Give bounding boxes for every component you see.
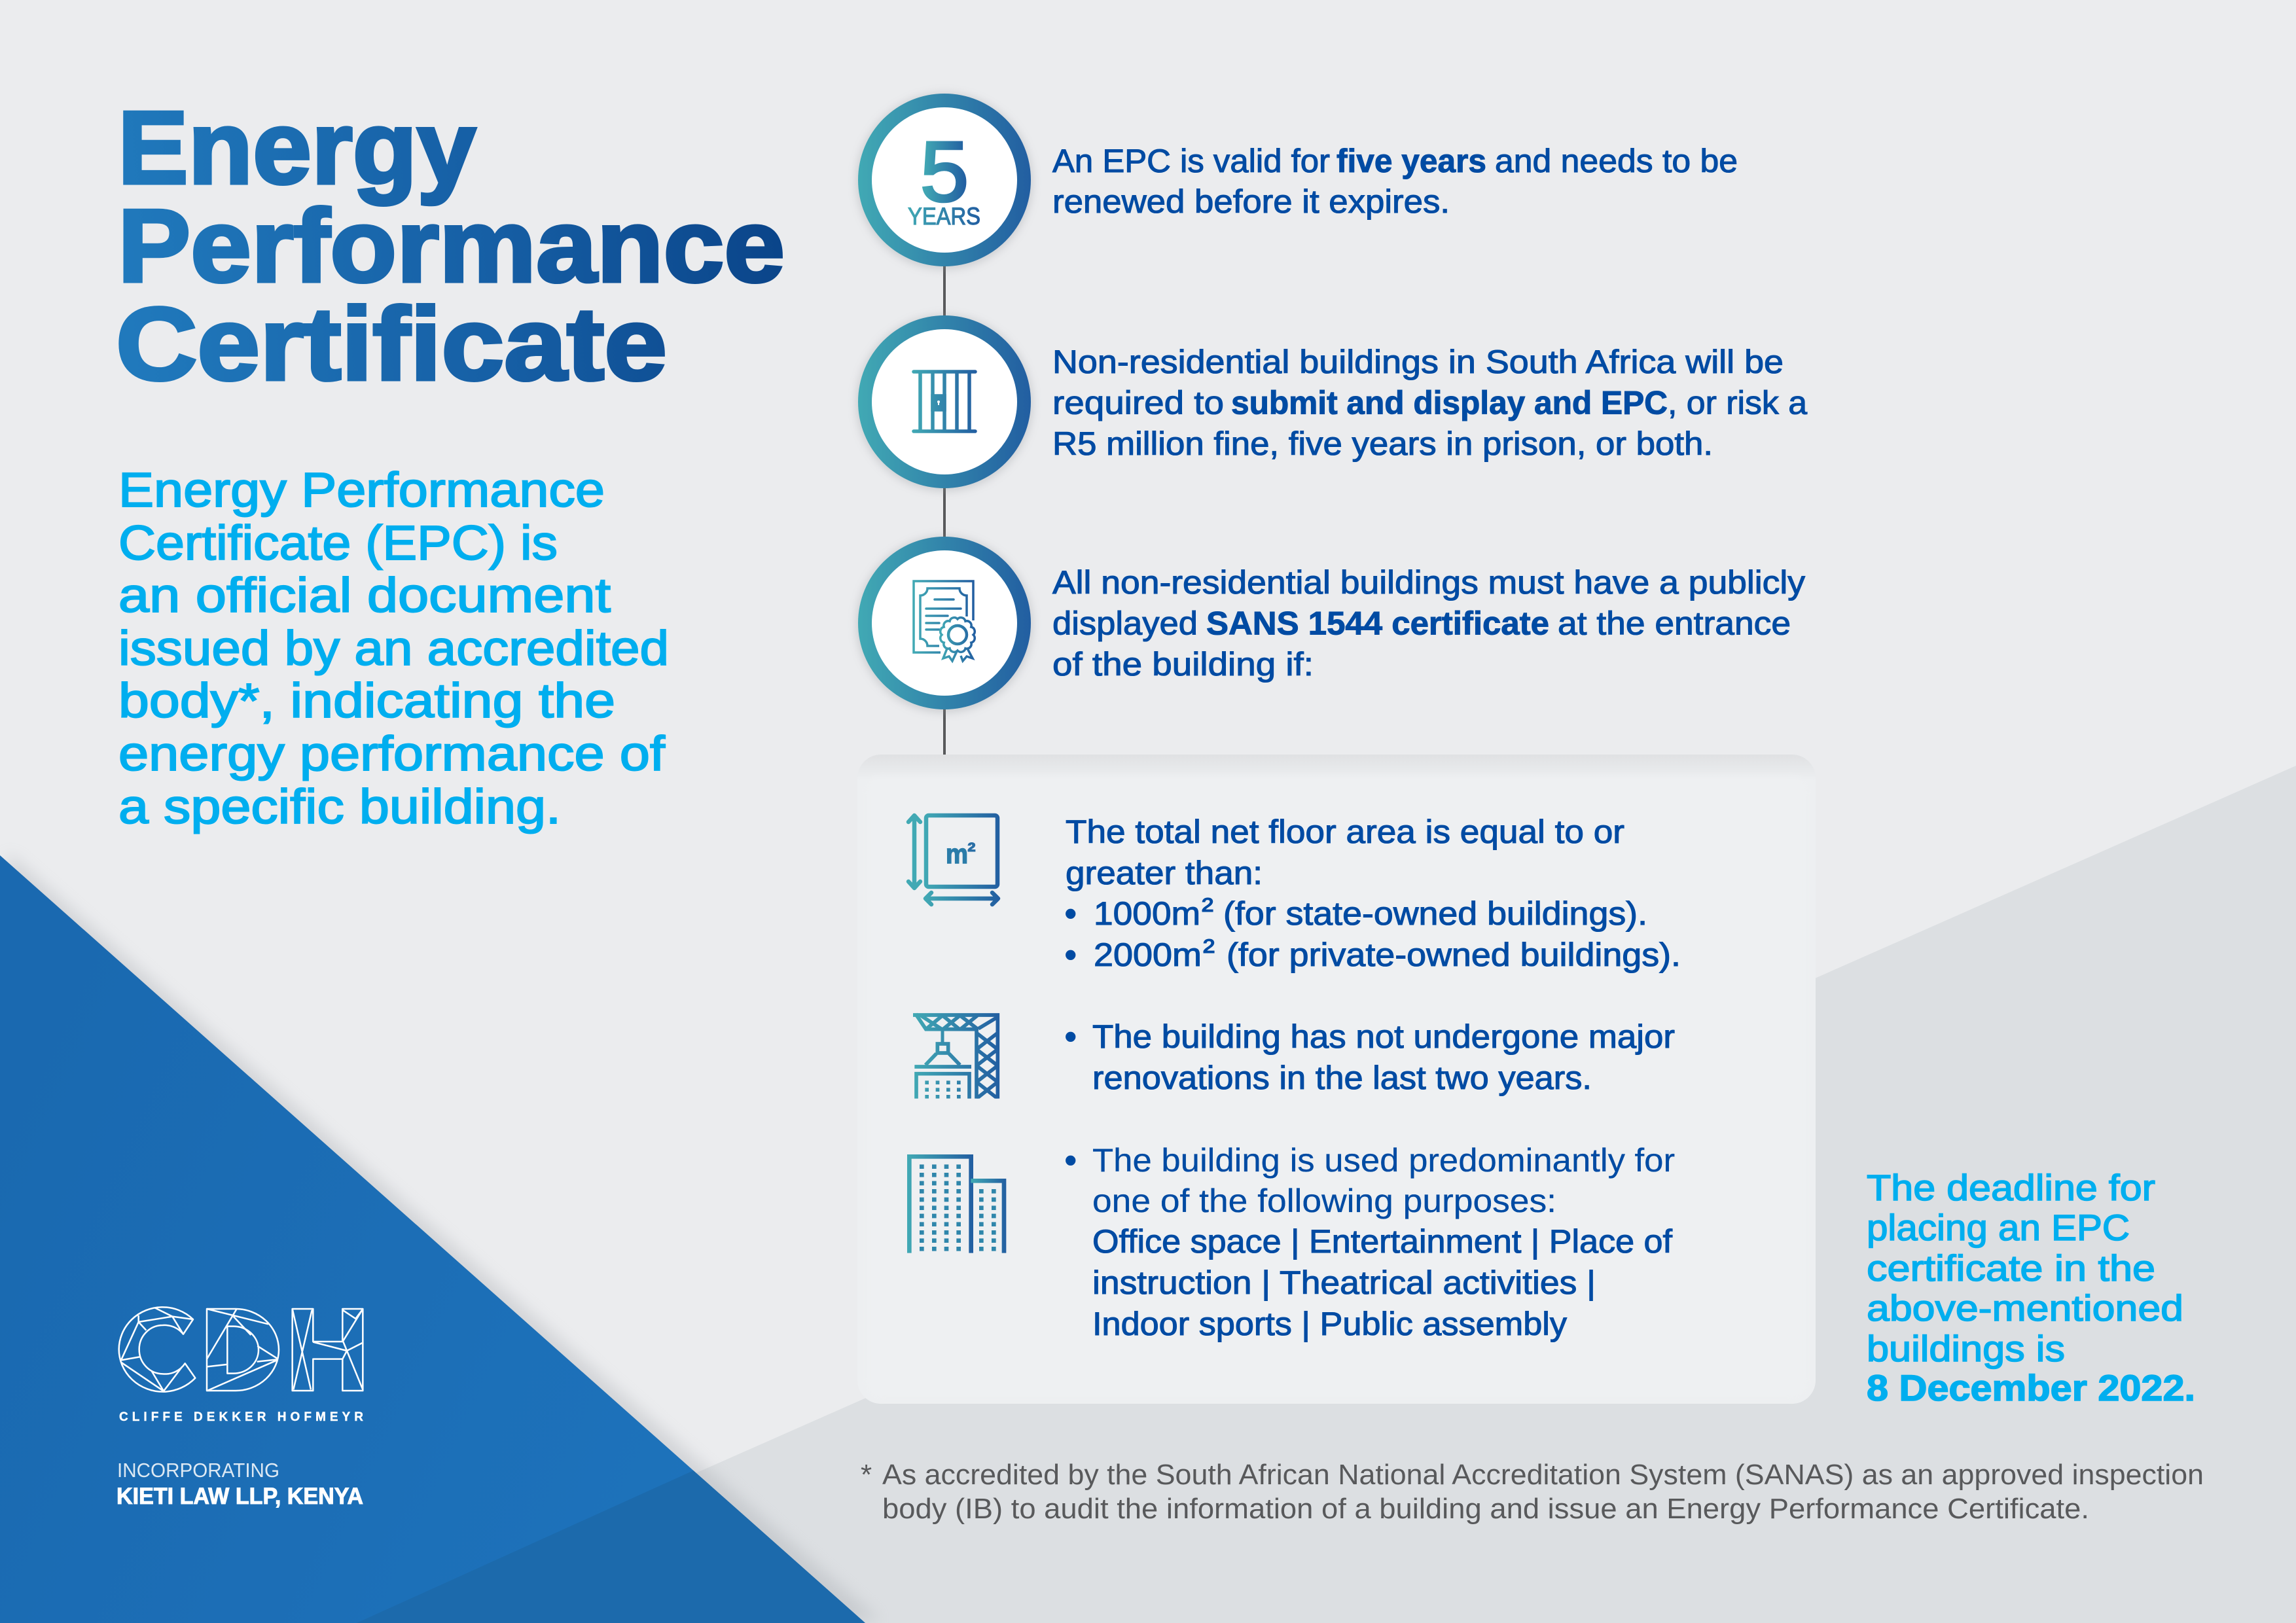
step 1 text: and needs to be: [1495, 143, 1738, 179]
intro text block: issued by an accredited: [118, 621, 669, 675]
floor area text: ²: [1203, 933, 1215, 969]
step 3 text: SANS 1544 certificate: [1206, 605, 1549, 641]
intro text block: an official document: [118, 568, 611, 622]
step 2 text: R5 million fine, five years in prison, or both.: [1052, 425, 1713, 462]
floor area text: The total net floor area is equal to or: [1066, 813, 1624, 850]
renovations text: renovations in the last two years.: [1092, 1060, 1592, 1096]
deadline callout: certificate in the: [1867, 1247, 2155, 1289]
icon: office buildings: [909, 1156, 1004, 1253]
icon: floor area m2: ²: [967, 838, 976, 866]
icon: floor area m2: m: [946, 838, 968, 869]
step 3 text: displayed: [1052, 605, 1198, 641]
step 1 text: renewed before it expires.: [1052, 183, 1450, 220]
step 3 text: [1052, 564, 1805, 683]
renovations text: [1065, 1018, 1675, 1096]
intro text block: [118, 463, 669, 834]
building use text: Office space | Entertainment | Place of: [1092, 1223, 1672, 1260]
step 3 text: of the building if:: [1052, 646, 1314, 683]
footnote: [861, 1459, 2204, 1525]
floor area text: (for private-owned buildings).: [1227, 936, 1681, 973]
step 2 text: submit and display and EPC: [1231, 385, 1668, 421]
step 3 circle: certificate icon: [857, 537, 1032, 712]
step 2 circle: jail bars icon: [857, 315, 1032, 491]
step 2 text: [1052, 344, 1807, 462]
timeline connector line: [943, 262, 946, 756]
blue corner triangle: [0, 853, 880, 1623]
renovations text: •: [1065, 1018, 1077, 1055]
step 2 text: , or risk a: [1668, 385, 1807, 421]
incorporating text: KIETI LAW LLP, KENYA: [117, 1484, 363, 1509]
renovations text: The building has not undergone major: [1092, 1018, 1675, 1055]
deadline callout: The deadline for: [1867, 1167, 2155, 1208]
title: [116, 90, 785, 402]
step 1 circle: 5 years: YEARS: [908, 203, 980, 230]
title: Energy: [118, 90, 476, 205]
footnote: As accredited by the South African National Accreditation System (SANAS) as an approved inspection: [882, 1459, 2204, 1491]
step 2 text: Non-residential buildings in South Africa will be: [1052, 344, 1784, 380]
floor area text: 1000m: [1094, 895, 1200, 932]
incorporating text: INCORPORATING: [117, 1459, 279, 1482]
floor area text: 2000m: [1094, 936, 1202, 973]
intro text block: a specific building.: [118, 779, 561, 834]
floor area text: ²: [1202, 891, 1213, 928]
building use text: Indoor sports | Public assembly: [1092, 1306, 1567, 1342]
building use text: instruction | Theatrical activities |: [1092, 1264, 1596, 1301]
intro text block: energy performance of: [118, 726, 665, 781]
step 1 circle: 5 years: [857, 94, 1032, 269]
icon: floor area m2: [908, 815, 998, 904]
step 1 circle: 5 years: 5: [920, 124, 969, 219]
deadline callout: above-mentioned: [1867, 1287, 2183, 1329]
building use text: The building is used predominantly for: [1092, 1142, 1675, 1179]
intro text block: Certificate (EPC) is: [118, 516, 558, 570]
building use text: one of the following purposes:: [1092, 1183, 1556, 1219]
building use text: •: [1065, 1142, 1077, 1179]
logo: CDH: [119, 1307, 363, 1424]
icon: construction crane: [913, 1014, 997, 1101]
step 2 text: required to: [1052, 385, 1224, 421]
floor area text: greater than:: [1066, 855, 1263, 891]
floor area text: •: [1065, 936, 1077, 973]
floor area text: •: [1065, 895, 1077, 932]
step 3 text: All non-residential buildings must have a publicly: [1052, 564, 1805, 601]
incorporating text: [117, 1459, 363, 1509]
floor area text: [1065, 813, 1681, 973]
icon: certificate: [914, 581, 975, 661]
panel: conditions: [857, 755, 1816, 1404]
step 1 text: [1052, 143, 1738, 220]
deadline callout: [1867, 1167, 2195, 1408]
title: Performance: [118, 188, 785, 304]
icon: jail bars: [914, 372, 975, 431]
title: Certificate: [116, 287, 667, 402]
step 1 text: five years: [1336, 143, 1486, 179]
deadline callout: 8 December 2022.: [1867, 1367, 2195, 1408]
intro text block: Energy Performance: [118, 463, 605, 517]
step 1 text: An EPC is valid for: [1052, 143, 1330, 179]
step 3 text: at the entrance: [1558, 605, 1791, 641]
deadline callout: buildings is: [1867, 1328, 2065, 1369]
footnote: body (IB) to audit the information of a building and issue an Energy Performance Certificate.: [882, 1493, 2089, 1525]
intro text block: body*, indicating the: [118, 673, 615, 728]
footnote: *: [861, 1459, 872, 1491]
logo: CDH: CLIFFE DEKKER HOFMEYR: [119, 1410, 363, 1424]
deadline callout: placing an EPC: [1867, 1207, 2130, 1248]
logo mark wireframe letters: [119, 1307, 363, 1392]
building use text: [1065, 1142, 1675, 1342]
floor area text: (for state-owned buildings).: [1223, 895, 1647, 932]
